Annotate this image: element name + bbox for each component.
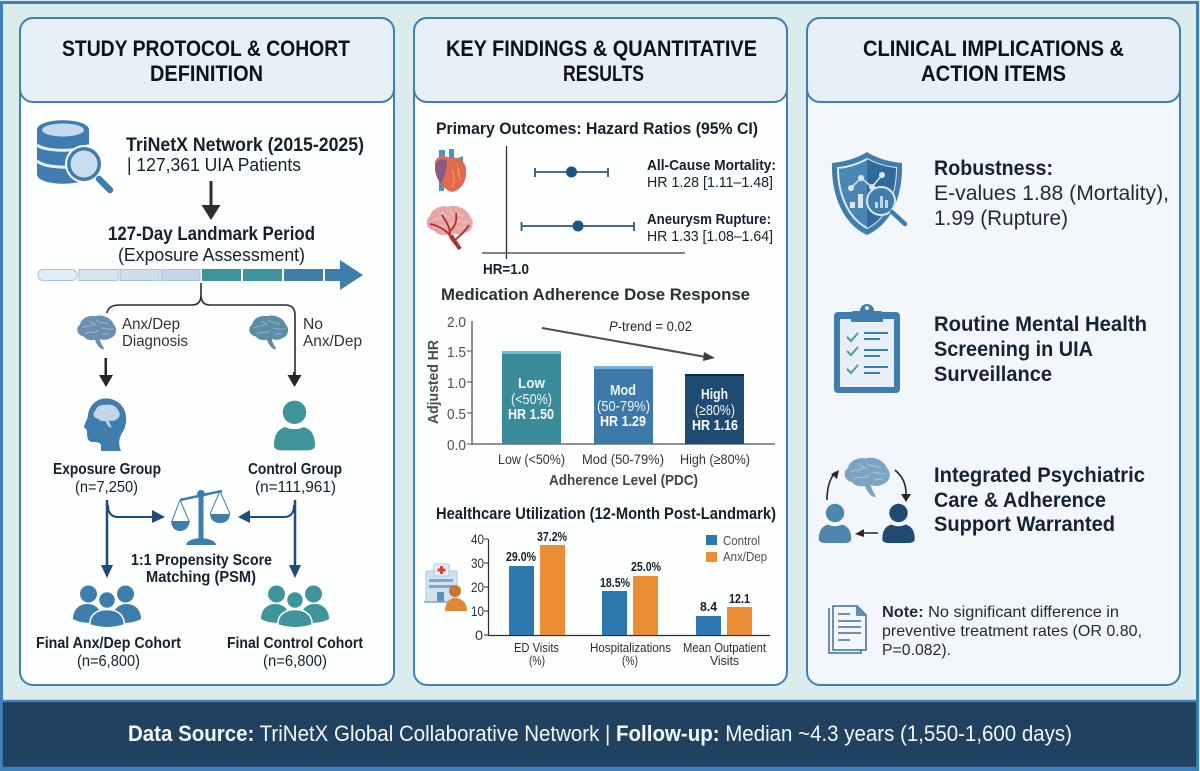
text: integrated care: Integrated Psychiatric bbox=[934, 464, 1145, 487]
label: exposure group: Exposure Group bbox=[53, 461, 161, 478]
icon: clipboard checklist bbox=[834, 304, 900, 393]
chart: forest plot bbox=[427, 119, 776, 278]
icon: balance scales bbox=[171, 490, 230, 545]
x axis category labels: Visits bbox=[710, 653, 739, 668]
bar: moderate adherence: HR 1.29 bbox=[600, 413, 646, 430]
bar: low adherence: Low bbox=[518, 375, 545, 392]
y axis ticks bbox=[471, 531, 484, 643]
y axis ticks: 2.0 bbox=[447, 315, 466, 331]
x axis category labels: High (≥80%) bbox=[680, 451, 750, 467]
icon: document note bbox=[829, 606, 866, 653]
bars: mean outpatient visits: 12.1 bbox=[729, 591, 750, 606]
label: aneurysm rupture: Aneurysm Rupture: bbox=[647, 211, 771, 228]
text: robustness: 1.99 (Rupture) bbox=[934, 207, 1068, 230]
arrow: control to final cohort bbox=[294, 500, 296, 566]
label: control group bbox=[248, 461, 342, 496]
label: p trend: P-trend = 0.02 bbox=[609, 318, 692, 334]
text: routine screening bbox=[934, 313, 1147, 386]
arrow: exposure to final cohort bbox=[106, 500, 108, 566]
icon: database with magnifier bbox=[37, 120, 110, 190]
label: final anx dep cohort bbox=[36, 635, 182, 670]
label: propensity matching: 1:1 Propensity Score bbox=[131, 552, 272, 569]
data: aneurysm rupture interval bbox=[521, 220, 634, 232]
icon: brain with vessels bbox=[427, 206, 473, 249]
panel: clinical implications bbox=[807, 18, 1180, 685]
label: anx dep diagnosis bbox=[122, 316, 188, 350]
bars: ED visits: 37.2% bbox=[537, 529, 567, 544]
bars: ED visits bbox=[506, 529, 567, 635]
text: data source bbox=[126, 135, 364, 175]
label: control group: Control Group bbox=[248, 461, 342, 478]
label: final anx dep cohort: Final Anx/Dep Cohort bbox=[36, 635, 182, 652]
heading: study protocol: DEFINITION bbox=[150, 61, 263, 86]
x axis category labels: ED Visits bbox=[514, 640, 559, 655]
text: note: Note: No significant difference in bbox=[882, 604, 1119, 621]
bar: low adherence: (<50%) bbox=[511, 391, 552, 408]
panel: study protocol and cohort definition bbox=[20, 18, 394, 685]
legend: Anx/Dep bbox=[723, 549, 767, 564]
x axis category labels: Mod (50-79%) bbox=[582, 451, 664, 467]
axis label: reference line: HR=1.0 bbox=[483, 262, 529, 278]
label: no anx dep bbox=[303, 316, 362, 350]
arrow: control to matching bbox=[238, 505, 294, 523]
chart title: primary outcomes: Primary Outcomes: Hazard Ratios (95% CI) bbox=[436, 119, 758, 138]
bars: ED visits: 29.0% bbox=[506, 549, 536, 564]
label: all-cause mortality: HR 1.28 [1.11–1.48] bbox=[647, 174, 773, 191]
text: integrated care bbox=[934, 464, 1145, 536]
icon: hospital with doctor bbox=[424, 564, 467, 611]
bar: high adherence: HR 1.16 bbox=[692, 417, 738, 434]
legend bbox=[706, 533, 767, 564]
arrow: to exposure group bbox=[99, 358, 113, 387]
y axis ticks: 0.0 bbox=[447, 438, 466, 454]
chart: healthcare utilization bbox=[424, 505, 776, 668]
bar: moderate adherence bbox=[594, 366, 653, 444]
icon: heart bbox=[435, 149, 466, 192]
text: integrated care: Care & Adherence bbox=[934, 489, 1106, 512]
label: aneurysm rupture bbox=[647, 211, 773, 245]
y axis ticks: 30 bbox=[471, 555, 484, 571]
label: exposure group: (n=7,250) bbox=[75, 479, 138, 496]
footer banner bbox=[2, 701, 1198, 768]
text: landmark period: (Exposure Assessment) bbox=[118, 244, 305, 265]
icon: anx dep cohort bbox=[73, 586, 141, 628]
heading: clinical implications: ACTION ITEMS bbox=[921, 61, 1066, 86]
text: robustness: E-values 1.88 (Mortality), bbox=[934, 182, 1169, 205]
x axis category labels: Hospitalizations bbox=[590, 640, 671, 655]
timeline arrow bbox=[38, 260, 363, 290]
label: propensity matching: Matching (PSM) bbox=[146, 569, 256, 586]
label: final control cohort: (n=6,800) bbox=[263, 653, 327, 670]
icon: control person bbox=[274, 401, 315, 450]
y axis ticks: 1.0 bbox=[447, 376, 466, 392]
arrow: to control group bbox=[288, 372, 302, 387]
heading: clinical implications: CLINICAL IMPLICATIONS & bbox=[863, 36, 1124, 61]
footer banner: Data Source: TriNetX Global Collaborative Network | Follow-up: Median ~4.3 years (1,550-1,600 days) bbox=[128, 721, 1072, 746]
chart: medication adherence dose response bbox=[425, 285, 775, 489]
bars: mean outpatient visits: 8.4 bbox=[700, 599, 718, 614]
label: no anx dep: No bbox=[303, 316, 323, 333]
bars: mean outpatient visits bbox=[696, 591, 752, 635]
heading: key findings: RESULTS bbox=[563, 61, 644, 86]
arrow: to landmark bbox=[202, 181, 220, 220]
x axis category labels: (%) bbox=[622, 653, 638, 668]
icon: brain anxiety bbox=[77, 316, 116, 349]
bar: moderate adherence: (50-79%) bbox=[597, 398, 650, 415]
label: final anx dep cohort: (n=6,800) bbox=[77, 653, 140, 670]
heading: study protocol bbox=[20, 18, 394, 102]
label: anx dep diagnosis: Anx/Dep bbox=[122, 316, 180, 333]
bars: hospitalizations: 25.0% bbox=[631, 559, 661, 574]
text: data source: TriNetX Network (2015-2025) bbox=[126, 135, 364, 156]
icon: brain no anxiety bbox=[249, 316, 288, 349]
panel: key findings bbox=[414, 18, 787, 685]
heading: study protocol: STUDY PROTOCOL & COHORT bbox=[62, 36, 350, 61]
label: no anx dep: Anx/Dep bbox=[303, 333, 362, 350]
bar: high adherence: High bbox=[701, 386, 728, 403]
y axis ticks: 20 bbox=[471, 579, 484, 595]
icon: shield with chart and magnifier bbox=[832, 152, 905, 235]
label: all-cause mortality bbox=[647, 157, 776, 191]
x axis category labels: Mean Outpatient bbox=[683, 640, 766, 655]
bar: low adherence bbox=[502, 351, 561, 444]
y axis ticks: 0 bbox=[475, 627, 483, 643]
y axis ticks: 10 bbox=[471, 603, 484, 619]
x axis category labels: Low (<50%) bbox=[498, 451, 565, 467]
y axis label: Adjusted HR bbox=[425, 340, 442, 424]
text: robustness bbox=[934, 157, 1169, 230]
heading: key findings bbox=[414, 18, 787, 102]
x axis title: Adherence Level (PDC) bbox=[549, 472, 698, 489]
y axis ticks: 1.5 bbox=[447, 345, 466, 361]
text: landmark period bbox=[108, 224, 315, 265]
x axis category labels bbox=[514, 640, 766, 668]
data: all-cause mortality interval bbox=[535, 166, 608, 178]
text: data source: | 127,361 UIA Patients bbox=[127, 154, 301, 175]
bracket: split into groups bbox=[107, 283, 295, 375]
y axis ticks: 0.5 bbox=[447, 407, 466, 423]
label: anx dep diagnosis: Diagnosis bbox=[122, 333, 188, 350]
bar: high adherence: (≥80%) bbox=[695, 402, 735, 419]
label: exposure group bbox=[53, 461, 161, 496]
label: final control cohort bbox=[227, 635, 364, 670]
y axis ticks bbox=[447, 315, 466, 454]
chart title: utilization: Healthcare Utilization (12-Month Post-Landmark) bbox=[436, 505, 776, 523]
x axis category labels bbox=[498, 451, 750, 467]
text: routine screening: Surveillance bbox=[934, 363, 1052, 386]
chart title: dose response: Medication Adherence Dose Response bbox=[441, 285, 750, 304]
bars: hospitalizations bbox=[600, 559, 661, 635]
text: note bbox=[882, 604, 1142, 659]
text: routine screening: Screening in UIA bbox=[934, 338, 1093, 361]
arrow: exposure to matching bbox=[108, 505, 165, 523]
text: integrated care: Support Warranted bbox=[934, 513, 1115, 536]
label: control group: (n=111,961) bbox=[255, 479, 336, 496]
x axis category labels: (%) bbox=[529, 653, 545, 668]
bar: high adherence bbox=[685, 374, 744, 444]
bar: low adherence: HR 1.50 bbox=[508, 406, 554, 423]
heading: clinical implications bbox=[807, 18, 1180, 102]
label: aneurysm rupture: HR 1.33 [1.08–1.64] bbox=[647, 228, 773, 245]
text: note: P=0.082). bbox=[882, 642, 951, 659]
legend: Control bbox=[723, 533, 760, 548]
arrow: trend bbox=[542, 328, 715, 361]
y axis ticks: 40 bbox=[471, 531, 484, 547]
label: all-cause mortality: All-Cause Mortality: bbox=[647, 157, 776, 174]
bars: hospitalizations: 18.5% bbox=[600, 575, 630, 590]
icon: head with brain bbox=[84, 398, 126, 451]
bar: moderate adherence: Mod bbox=[610, 382, 636, 399]
text: landmark period: 127-Day Landmark Period bbox=[108, 224, 315, 245]
label: propensity matching bbox=[131, 552, 272, 586]
text: routine screening: Routine Mental Health bbox=[934, 313, 1147, 336]
text: robustness: Robustness: bbox=[934, 157, 1053, 180]
icon: integrated care cycle bbox=[819, 458, 915, 543]
heading: key findings: KEY FINDINGS & QUANTITATIVE bbox=[446, 36, 757, 61]
icon: control cohort bbox=[261, 586, 329, 628]
label: final control cohort: Final Control Cohort bbox=[227, 635, 364, 652]
text: note: preventive treatment rates (OR 0.80, bbox=[882, 623, 1142, 640]
